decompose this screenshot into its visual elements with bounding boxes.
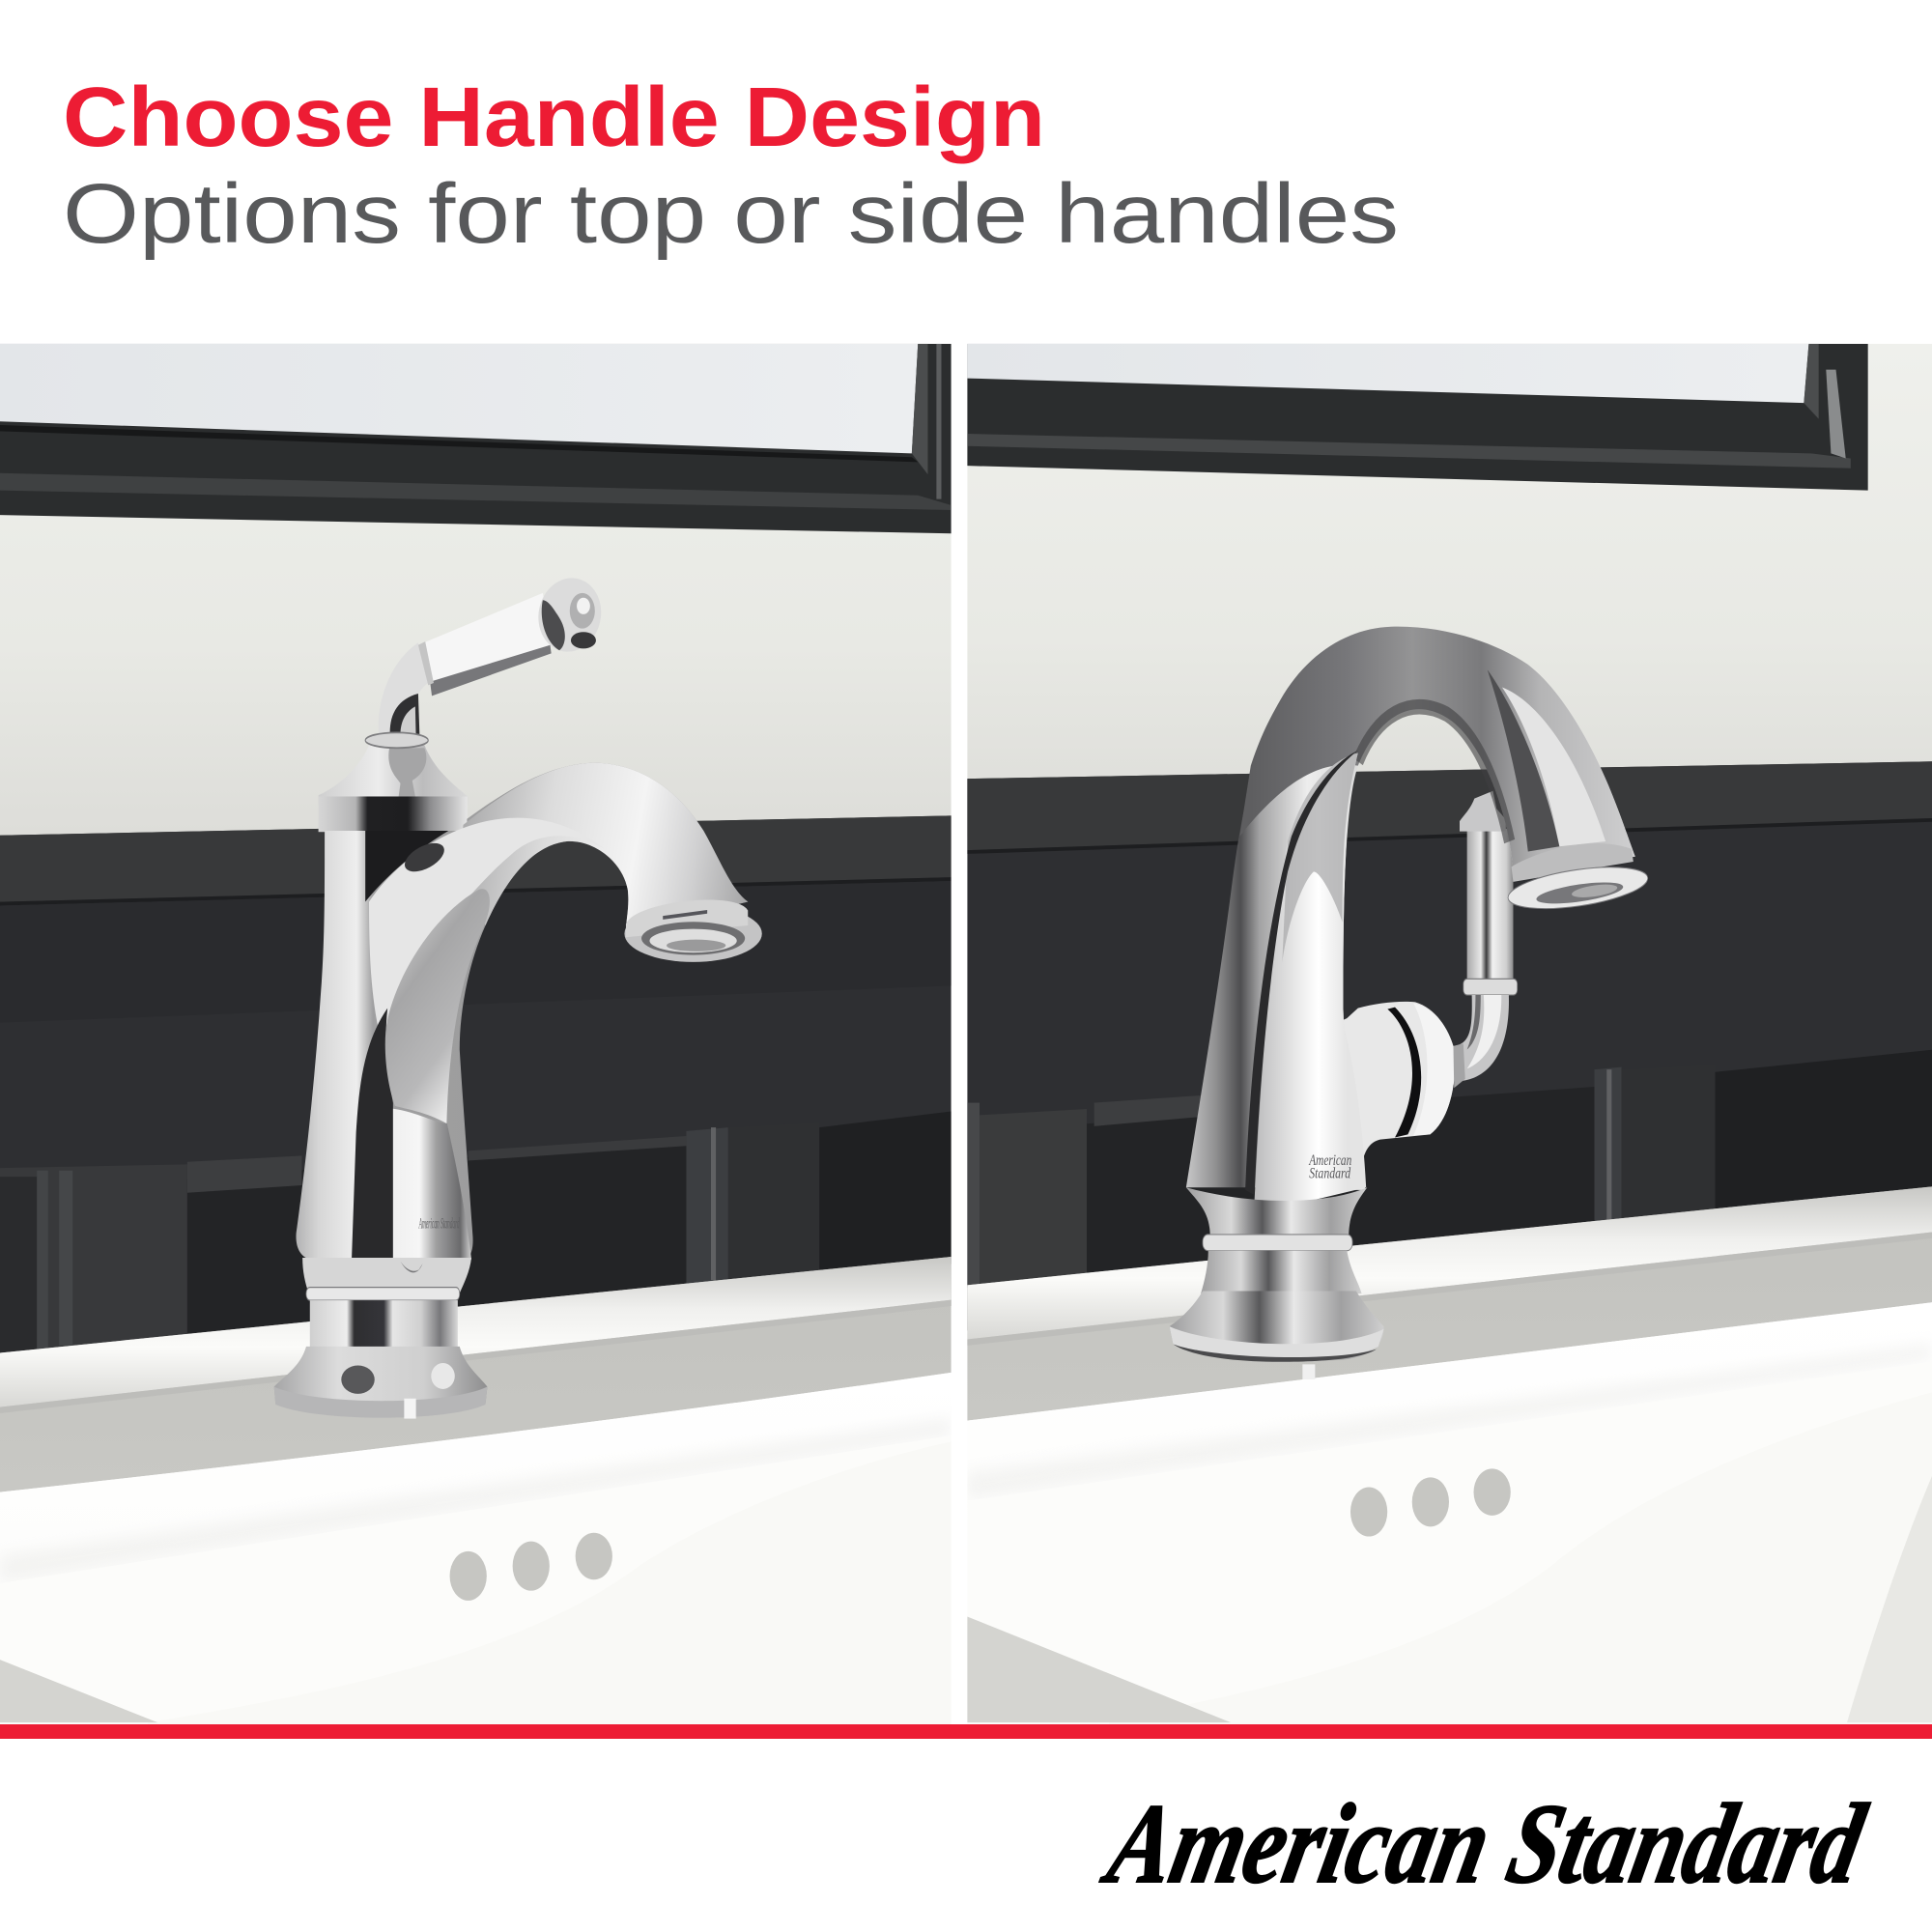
- engraved brand: Standard: [1309, 1165, 1350, 1181]
- title block: [63, 71, 1399, 261]
- spout highlight: [463, 763, 748, 931]
- front highlight: [1255, 753, 1366, 1203]
- vanity deck: [0, 1257, 952, 1492]
- sink basin: [2, 1373, 950, 1492]
- back ledge: [0, 1257, 952, 1407]
- faucet: top handle: [274, 573, 762, 1419]
- teardrop reflection: [385, 889, 490, 1123]
- dark underside reflection: [352, 1009, 393, 1260]
- top lever handle: [379, 573, 604, 737]
- spout arc and body: [1186, 627, 1635, 1187]
- overflow holes: [1350, 1468, 1511, 1537]
- wall: [968, 344, 1932, 779]
- mirror with black frame: [967, 344, 1868, 491]
- base trim: [1170, 1187, 1384, 1379]
- subheading: Options for top or side handles: [63, 167, 1399, 261]
- red divider bar: [0, 1724, 1932, 1739]
- dark wainscot: [967, 761, 1932, 1331]
- back ledge: [967, 1186, 1932, 1339]
- dark reflection near band: [365, 831, 448, 901]
- engraved brand: [1308, 1151, 1351, 1181]
- base trim: [274, 1258, 487, 1419]
- handle hub: [1324, 1002, 1465, 1190]
- photo panel: top handle faucet scene: [0, 344, 952, 1725]
- wall: [0, 515, 951, 836]
- lower stem: [393, 1109, 471, 1260]
- spout top reflections: [1239, 627, 1635, 871]
- mirror with black frame: [0, 344, 952, 533]
- overflow holes: [450, 1533, 612, 1601]
- headline: Choose Handle Design: [63, 71, 1045, 164]
- photo panel: side handle faucet scene: [967, 344, 1932, 1725]
- faucet body and spout: [296, 763, 748, 1260]
- spout aerator: [1507, 843, 1649, 916]
- dark wainscot: [0, 815, 952, 1368]
- panel gutter: [952, 344, 967, 1725]
- engraved brand: American: [1308, 1151, 1351, 1168]
- dome and collar: [319, 732, 468, 832]
- side lever handle: [1454, 791, 1518, 1081]
- engraved brand: American Standard: [418, 1214, 460, 1232]
- sink basin: [969, 1302, 1932, 1420]
- vanity deck: [967, 1186, 1932, 1421]
- spout aerator: [624, 900, 762, 962]
- faucet: side handle: [1170, 627, 1649, 1379]
